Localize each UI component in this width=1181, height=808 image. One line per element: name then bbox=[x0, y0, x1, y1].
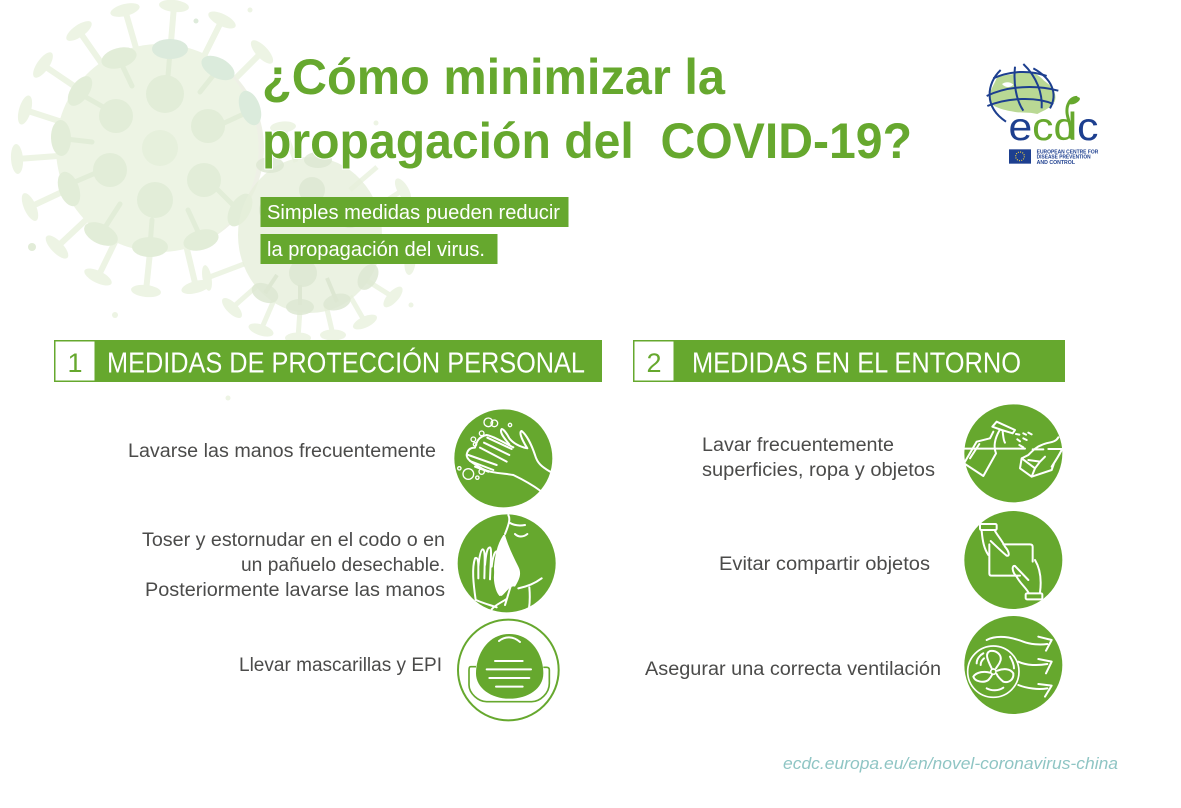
text: masks: Llevar mascarillas y EPI bbox=[239, 655, 442, 676]
icon: ventilation fan bbox=[964, 616, 1062, 714]
small virus illustration bbox=[200, 120, 417, 343]
EU flag bbox=[1009, 149, 1031, 164]
text: cough and sneeze: Toser y estornudar en el codo o en bbox=[142, 530, 445, 551]
title bbox=[262, 49, 912, 169]
icon: sharing objects bbox=[964, 511, 1062, 609]
text: clean surfaces bbox=[702, 435, 935, 481]
organisation name: AND CONTROL bbox=[1037, 160, 1075, 166]
organisation name: DISEASE PREVENTION bbox=[1037, 155, 1091, 161]
text: ventilation: Asegurar una correcta ventilación bbox=[645, 659, 941, 680]
text: do not share objects: Evitar compartir objetos bbox=[719, 554, 930, 575]
subtitle: Simples medidas pueden reducir bbox=[267, 202, 560, 224]
subtitle: la propagación del virus. bbox=[267, 239, 485, 261]
section 1 heading bbox=[54, 340, 602, 382]
title: propagación del COVID-19? bbox=[262, 113, 912, 169]
subtitle bbox=[260, 197, 568, 264]
title: ¿Cómo minimizar la bbox=[262, 49, 726, 105]
section 2 heading bbox=[634, 340, 1064, 382]
text: hand washing: Lavarse las manos frecuentemente bbox=[128, 441, 436, 462]
source URL: ecdc.europa.eu/en/novel-coronavirus-china bbox=[783, 754, 1118, 773]
wordmark: ecdc bbox=[1008, 106, 1098, 149]
icon: face mask bbox=[458, 620, 559, 720]
globe bbox=[987, 64, 1058, 122]
large virus illustration bbox=[10, 0, 277, 401]
section 2 heading: 2 bbox=[646, 348, 662, 378]
text: cough and sneeze bbox=[142, 530, 445, 601]
icon: washing hands bbox=[454, 409, 552, 507]
leaf sprout bbox=[1067, 95, 1081, 138]
text: clean surfaces: superficies, ropa y objetos bbox=[702, 460, 935, 481]
icon: spray and cloth bbox=[964, 404, 1062, 502]
organisation name: EUROPEAN CENTRE FOR bbox=[1037, 149, 1098, 155]
section 1 heading: MEDIDAS DE PROTECCIÓN PERSONAL bbox=[107, 346, 585, 380]
text: cough and sneeze: un pañuelo desechable. bbox=[241, 555, 445, 576]
section 2 heading: MEDIDAS EN EL ENTORNO bbox=[692, 348, 1021, 380]
icon: coughing into tissue bbox=[458, 514, 556, 612]
organisation name bbox=[1037, 149, 1098, 166]
text: clean surfaces: Lavar frecuentemente bbox=[702, 435, 894, 456]
ECDC logo bbox=[987, 64, 1098, 166]
text: cough and sneeze: Posteriormente lavarse las manos bbox=[145, 580, 445, 601]
section 1 heading: 1 bbox=[67, 348, 83, 378]
